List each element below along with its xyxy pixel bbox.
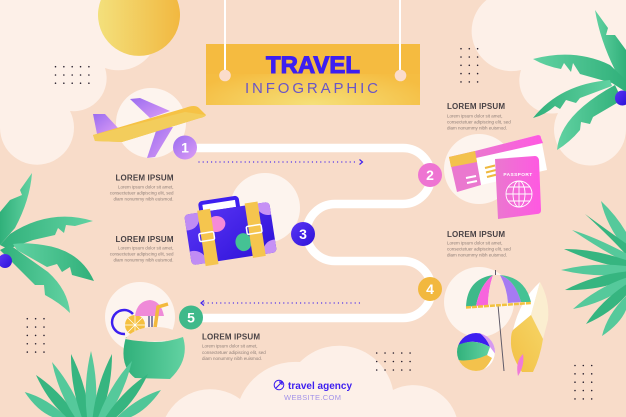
text block: step 5: consectetuer adipiscing elit, sed xyxy=(202,350,266,355)
text block: step 4 xyxy=(447,230,511,258)
dot grid: bottom right xyxy=(575,366,592,400)
step badge 1 xyxy=(173,136,197,160)
text block: step 4: LOREM IPSUM xyxy=(447,230,505,239)
text block: step 2: diam nonummy nibh euismod. xyxy=(447,126,507,130)
step badge 4 xyxy=(418,277,442,301)
title banner xyxy=(206,44,420,105)
step badge 2: 2 xyxy=(426,167,434,183)
text block: step 5: diam nonummy nibh euismod. xyxy=(202,356,262,361)
dotted arrow: bottom xyxy=(201,300,361,306)
subtitle: INFOGRAPHIC: INFOGRAPHIC xyxy=(245,80,378,97)
cloud: bottom xyxy=(166,346,456,417)
illustration: beach umbrella, surfboard and ball xyxy=(444,267,548,376)
step badge 3 xyxy=(291,222,315,246)
text block: step 3: Lorem ipsum dolor sit amet, xyxy=(118,246,174,250)
step badge 2 xyxy=(418,163,442,187)
dot grid: top right xyxy=(461,49,478,83)
route path xyxy=(185,148,432,318)
cloud: top left xyxy=(0,0,158,165)
title: TRAVEL: TRAVEL xyxy=(266,52,360,79)
cloud: top right xyxy=(472,0,626,165)
text block: step 5 xyxy=(202,332,266,361)
dot grid: lower left xyxy=(27,319,44,353)
step badge 4: 4 xyxy=(426,281,434,297)
text block: step 2: Lorem ipsum dolor sit amet, xyxy=(447,114,503,118)
step badge 3: 3 xyxy=(299,226,307,242)
text block: step 4: Lorem ipsum dolor sit amet, xyxy=(447,240,503,246)
beach umbrella xyxy=(466,270,531,371)
beach ball xyxy=(456,332,496,372)
passport label: PASSPORT xyxy=(503,172,533,178)
text block: step 3 xyxy=(110,235,174,262)
step badge 1: 1 xyxy=(181,140,189,156)
agency name: travel agency xyxy=(288,381,352,392)
text block: step 1: consectetuer adipiscing elit, sed xyxy=(110,190,174,196)
text block: step 1 xyxy=(110,174,174,202)
text block: step 2: consectetuer adipiscing elit, sed xyxy=(447,120,511,124)
text block: step 5: LOREM IPSUM xyxy=(202,332,260,342)
dotted arrow: top xyxy=(199,160,362,164)
text block: step 5: Lorem ipsum dolor sit amet, xyxy=(202,344,258,348)
text block: step 3: LOREM IPSUM xyxy=(116,235,174,244)
sun xyxy=(98,0,180,56)
footer logo xyxy=(274,380,352,402)
text block: step 2 xyxy=(447,102,511,130)
dot grid: top left xyxy=(56,67,90,83)
text block: step 2: LOREM IPSUM xyxy=(447,102,505,111)
banner hanger: right xyxy=(395,0,406,81)
step badge 5: 5 xyxy=(187,310,195,326)
illustration: suitcase xyxy=(184,173,300,266)
banner hanger: left xyxy=(219,0,231,81)
icon: globe with plane xyxy=(274,380,284,390)
text block: step 1: LOREM IPSUM xyxy=(116,174,174,182)
text block: step 1: Lorem ipsum dolor sit amet, xyxy=(118,184,174,190)
text block: step 1: diam nonummy nibh euismod. xyxy=(113,196,174,202)
plant: right xyxy=(561,201,626,336)
dot grid: bottom centre xyxy=(377,353,411,370)
text block: step 4: diam nonummy nibh euismod. xyxy=(447,252,507,258)
plant: bottom left xyxy=(25,351,161,417)
icon: globe xyxy=(506,181,532,207)
text block: step 3: consectetuer adipiscing elit, sed xyxy=(110,252,174,256)
illustration: ticket and passport xyxy=(444,134,547,219)
website: WEBSITE.COM xyxy=(284,393,341,402)
palm: left xyxy=(0,173,94,313)
surfboard xyxy=(511,282,548,376)
illustration: coconut drink xyxy=(105,282,185,379)
palm: top right xyxy=(533,10,626,150)
step badge 5 xyxy=(179,306,203,330)
text block: step 3: diam nonummy nibh euismod. xyxy=(113,258,174,262)
illustration: airplane xyxy=(93,88,206,158)
text block: step 4: consectetuer adipiscing elit, sed xyxy=(447,246,511,252)
